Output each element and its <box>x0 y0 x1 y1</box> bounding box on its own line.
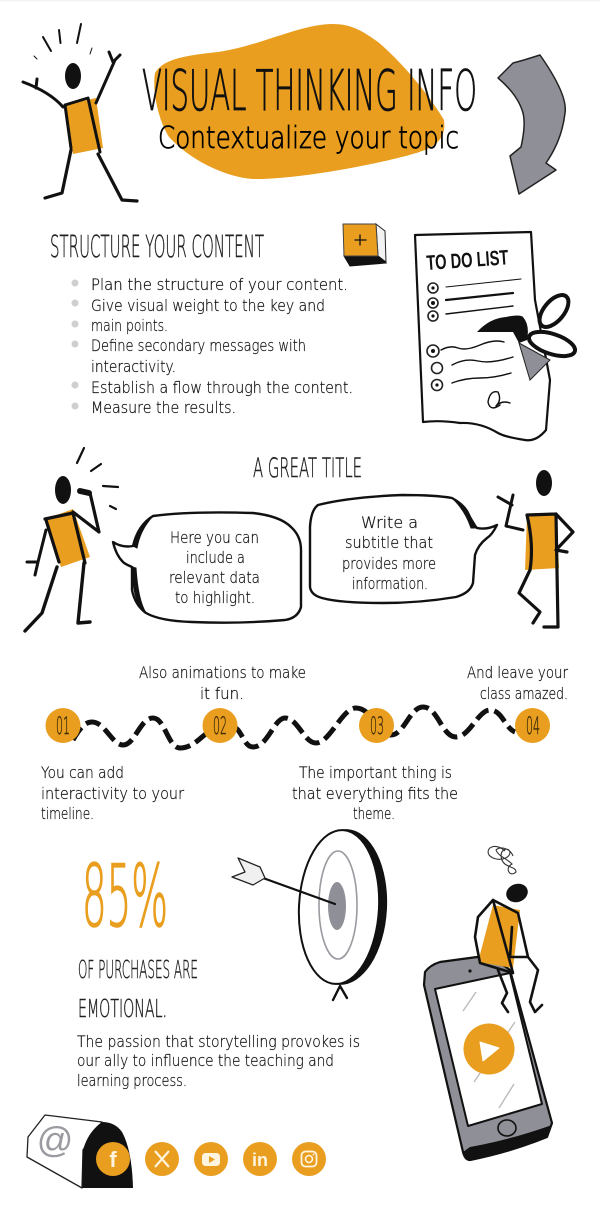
panel: statistic: 85% <box>82 847 168 947</box>
speech bubble right <box>310 495 497 603</box>
icon: x <box>145 1142 179 1176</box>
timeline numbers <box>56 712 540 740</box>
speech bubble right: Write a <box>361 513 418 532</box>
statistic description: our ally to influence the teaching and <box>77 1051 334 1070</box>
panel: a great title <box>25 448 573 631</box>
step 3 text: that everything fits the <box>292 784 458 803</box>
statistic description <box>77 1032 360 1090</box>
heading: A GREAT TITLE <box>253 453 362 484</box>
bullet list: Define secondary messages with <box>91 336 306 355</box>
icon: facebook <box>96 1142 130 1176</box>
icon: facebook: f <box>109 1147 117 1172</box>
wavy dashed line <box>73 707 515 748</box>
panel: statistic: OF PURCHASES ARE <box>78 955 198 984</box>
speech bubble right: information. <box>352 574 428 593</box>
illustration: to do list: TO DO LIST <box>426 246 509 275</box>
bullet list: Give visual weight to the key and <box>91 296 325 315</box>
subtitle: Contextualize your topic <box>158 121 459 156</box>
speech bubble left: to highlight. <box>175 588 255 607</box>
icon: mailbox: @ <box>37 1119 73 1160</box>
step 4 text: class amazed. <box>480 684 568 703</box>
panel: timeline <box>41 663 568 823</box>
icon: mailbox <box>27 1115 133 1188</box>
icon: grey curved arrow <box>498 55 565 194</box>
timeline numbers: 02 <box>213 712 227 740</box>
step 3 text: theme. <box>353 804 395 823</box>
bullet list: Establish a flow through the content. <box>91 378 353 397</box>
step 3 text: The important thing is <box>299 763 452 782</box>
statistic label: EMOTIONAL. <box>78 994 167 1023</box>
illustration: target with arrow <box>232 827 391 1000</box>
panel: timeline: 04 <box>526 712 540 740</box>
step 1 text <box>41 763 184 823</box>
illustration: character on phone <box>424 846 552 1160</box>
panel: structure your content: STRUCTURE YOUR CONTENT <box>50 230 264 265</box>
step 4 text: And leave your <box>467 663 568 682</box>
step 2 text: it fun. <box>200 684 244 703</box>
bullet list: main points. <box>91 316 168 335</box>
step 3 text <box>292 763 458 823</box>
timeline nodes <box>46 708 550 743</box>
bullet list <box>72 275 353 417</box>
panel: contact and social <box>27 1115 326 1188</box>
header section <box>23 24 565 201</box>
speech bubble left: Here you can <box>170 528 259 547</box>
step 1 text: timeline. <box>41 804 94 823</box>
icon: youtube <box>194 1142 228 1176</box>
panel: structure your content <box>50 224 578 440</box>
icon: instagram <box>292 1142 326 1176</box>
step 4 text <box>467 663 568 703</box>
step 2 text <box>139 663 306 703</box>
speech bubble left: include a <box>186 548 245 567</box>
speech bubble right: subtitle that <box>345 533 433 552</box>
bullet list: Measure the results. <box>91 398 236 417</box>
timeline numbers: 01 <box>56 712 70 740</box>
character: cheering figure <box>23 24 137 201</box>
illustration: to do list <box>415 232 578 440</box>
icon: linkedin: in <box>252 1150 268 1170</box>
character: figure with megaphone <box>25 448 118 631</box>
orange blob <box>154 24 444 179</box>
icon: linkedin <box>243 1142 277 1176</box>
statistic description: The passion that storytelling provokes is <box>77 1032 360 1051</box>
statistic label <box>78 955 198 1023</box>
speech bubble right: provides more <box>342 554 436 573</box>
panel: statistic <box>77 827 552 1160</box>
step 1 text: You can add <box>41 763 124 782</box>
timeline numbers: 03 <box>370 712 384 740</box>
character: figure with raised hand <box>498 470 573 627</box>
step 1 text: interactivity to your <box>41 784 184 803</box>
statistic description: learning process. <box>77 1071 187 1090</box>
bullet list: interactivity. <box>91 357 176 376</box>
step 2 text: Also animations to make <box>139 663 306 682</box>
speech bubble left: relevant data <box>169 568 260 587</box>
speech bubble left <box>113 512 301 623</box>
bullet list: Plan the structure of your content. <box>91 275 348 294</box>
icon: plus cube <box>343 224 386 266</box>
